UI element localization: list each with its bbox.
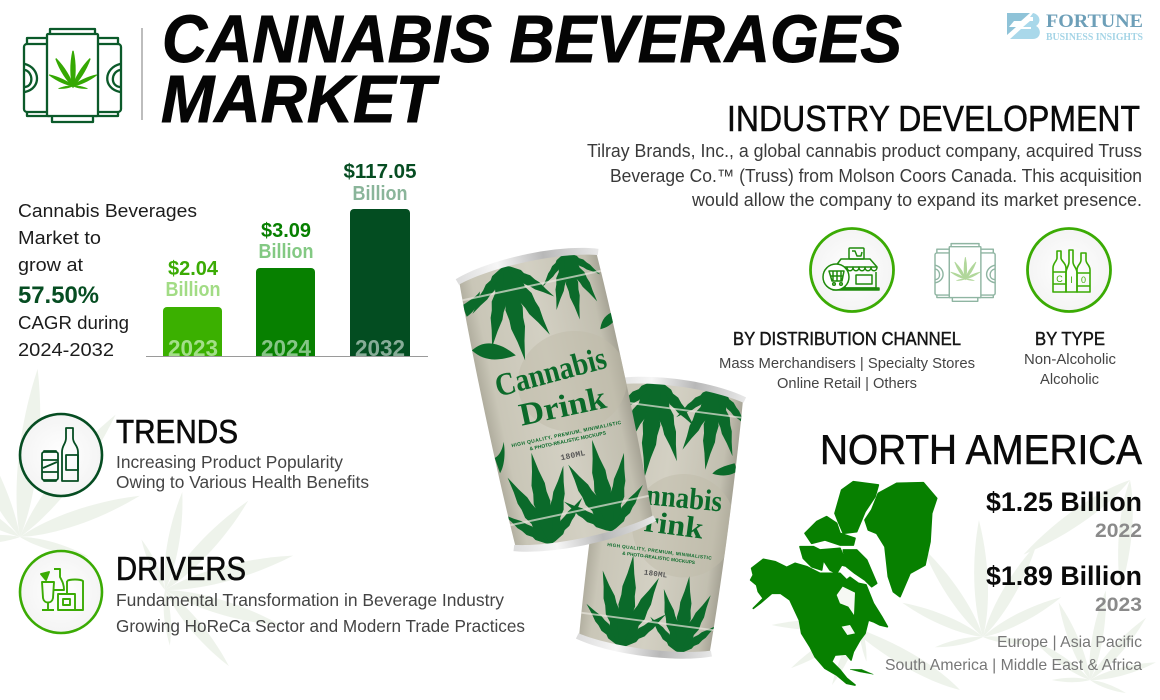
- text: distribution channel segment: [719, 329, 975, 392]
- can lettering: & PHOTO-REALISTIC MOCKUPS: [529, 430, 607, 452]
- text: industry development detail: [587, 141, 1142, 210]
- text: type segment: Alcoholic: [1040, 371, 1099, 388]
- icon: drinks: [20, 551, 102, 633]
- heading: drivers: DRIVERS: [116, 550, 246, 587]
- bar 2032: 2032: [355, 335, 405, 361]
- icon: bottles: C: [1056, 274, 1063, 284]
- icon leaf: [48, 51, 98, 89]
- panel: trends: [20, 413, 369, 496]
- title: [161, 2, 902, 137]
- text: drivers detail: [116, 590, 525, 636]
- text: drivers detail: Growing HoReCa Sector and Modern Trade Practices: [116, 616, 525, 636]
- heading: trends: TRENDS: [116, 413, 238, 450]
- text block: CAGR summary: Market to: [18, 228, 101, 248]
- faded can leaf: [950, 257, 981, 281]
- bar 2023: Billion: [166, 279, 220, 301]
- text: type segment: Non-Alcoholic: [1024, 351, 1116, 368]
- stat: 2023 value: $1.89 Billion: [986, 561, 1142, 591]
- can lettering: & PHOTO-REALISTIC MOCKUPS: [622, 551, 695, 565]
- can lettering: 180ML: [560, 449, 586, 463]
- text: trends detail: [116, 452, 369, 492]
- icon: store and shopping cart: [810, 228, 894, 312]
- bar 2023: [163, 258, 222, 361]
- bar 2024: 2024: [261, 335, 311, 361]
- text: trends detail: Owing to Various Health Benefits: [116, 472, 369, 492]
- header divider: [141, 28, 143, 120]
- text block: CAGR summary: 2024-2032: [18, 340, 114, 360]
- heading: north america: NORTH AMERICA: [820, 426, 1142, 473]
- icon: bottles: 0: [1081, 275, 1086, 285]
- text: industry development detail: Beverage Co.™ (Truss) from Molson Coors Canada. This acquisition: [610, 166, 1142, 186]
- bar 2032: Billion: [352, 183, 408, 205]
- bar 2024: [256, 220, 315, 361]
- can lettering: HIGH QUALITY, PREMIUM, MINIMALISTIC: [511, 420, 622, 449]
- text: distribution channel segment: Mass Merchandisers | Specialty Stores: [719, 355, 975, 372]
- can illustration: rear can: [576, 376, 746, 659]
- bar 2024: Billion: [258, 241, 314, 263]
- bar 2023: 2023: [168, 335, 218, 361]
- can lettering: 180ML: [643, 570, 668, 581]
- icon: faded cans: [935, 244, 995, 301]
- text: industry development detail: Tilray Brands, Inc., a global cannabis product company, acquired Truss: [587, 141, 1142, 161]
- bar chart: [146, 161, 428, 361]
- can lettering: [602, 470, 725, 586]
- text block: CAGR summary: 57.50%: [18, 282, 99, 309]
- panel: drivers: [20, 550, 525, 636]
- text: other regions: [885, 634, 1142, 674]
- text: other regions: South America | Middle East & Africa: [885, 657, 1142, 674]
- logo: Fortune Business Insights: FORTUNE: [1046, 11, 1143, 32]
- stat: 2022 value: [986, 487, 1142, 542]
- icon: can and bottle: [20, 414, 102, 496]
- bar 2023: $2.04: [168, 258, 219, 280]
- stat: 2023 value: 2023: [1095, 595, 1142, 616]
- can lettering: Drink: [516, 379, 609, 433]
- title: MARKET: [161, 62, 440, 137]
- text: distribution channel segment: Online Retail | Others: [777, 375, 917, 392]
- can lettering: Cannabis: [612, 474, 724, 518]
- can lettering: Drink: [619, 501, 706, 546]
- text block: CAGR summary: CAGR during: [18, 313, 129, 333]
- logo: Fortune Business Insights: [1007, 11, 1143, 43]
- title: CANNABIS BEVERAGES: [162, 2, 902, 77]
- text: trends detail: Increasing Product Popularity: [116, 452, 343, 472]
- map: North America: [751, 482, 937, 685]
- stat: 2023 value: [986, 561, 1142, 616]
- icon: bottles: [1028, 228, 1110, 312]
- can lettering: HIGH QUALITY, PREMIUM, MINIMALISTIC: [607, 542, 713, 561]
- text block: CAGR summary: [18, 201, 197, 360]
- text: drivers detail: Fundamental Transformation in Beverage Industry: [116, 590, 504, 610]
- icon: cannabis cans logo: [24, 29, 121, 122]
- background: faint cannabis leaves: [0, 357, 1160, 700]
- text: type segment: [1024, 329, 1116, 388]
- can lettering: [489, 339, 627, 474]
- text block: CAGR summary: Cannabis Beverages: [18, 201, 197, 221]
- icon: bottles: I: [1070, 275, 1073, 285]
- stat: 2022 value: $1.25 Billion: [986, 487, 1142, 517]
- bar 2032: [344, 161, 416, 361]
- can lettering: Cannabis: [491, 339, 610, 404]
- text: type segment: BY TYPE: [1035, 329, 1105, 349]
- text: other regions: Europe | Asia Pacific: [997, 634, 1142, 651]
- bar 2024: $3.09: [261, 220, 311, 242]
- text: industry development detail: would allow the company to expand its market presence.: [691, 190, 1142, 210]
- bar 2032: $117.05: [344, 161, 416, 183]
- stat: 2022 value: 2022: [1095, 521, 1142, 542]
- text: distribution channel segment: BY DISTRIBUTION CHANNEL: [733, 329, 961, 349]
- can illustration: front can: [456, 248, 656, 552]
- logo: Fortune Business Insights: BUSINESS INSIGHTS: [1046, 32, 1143, 43]
- text block: CAGR summary: grow at: [18, 255, 83, 275]
